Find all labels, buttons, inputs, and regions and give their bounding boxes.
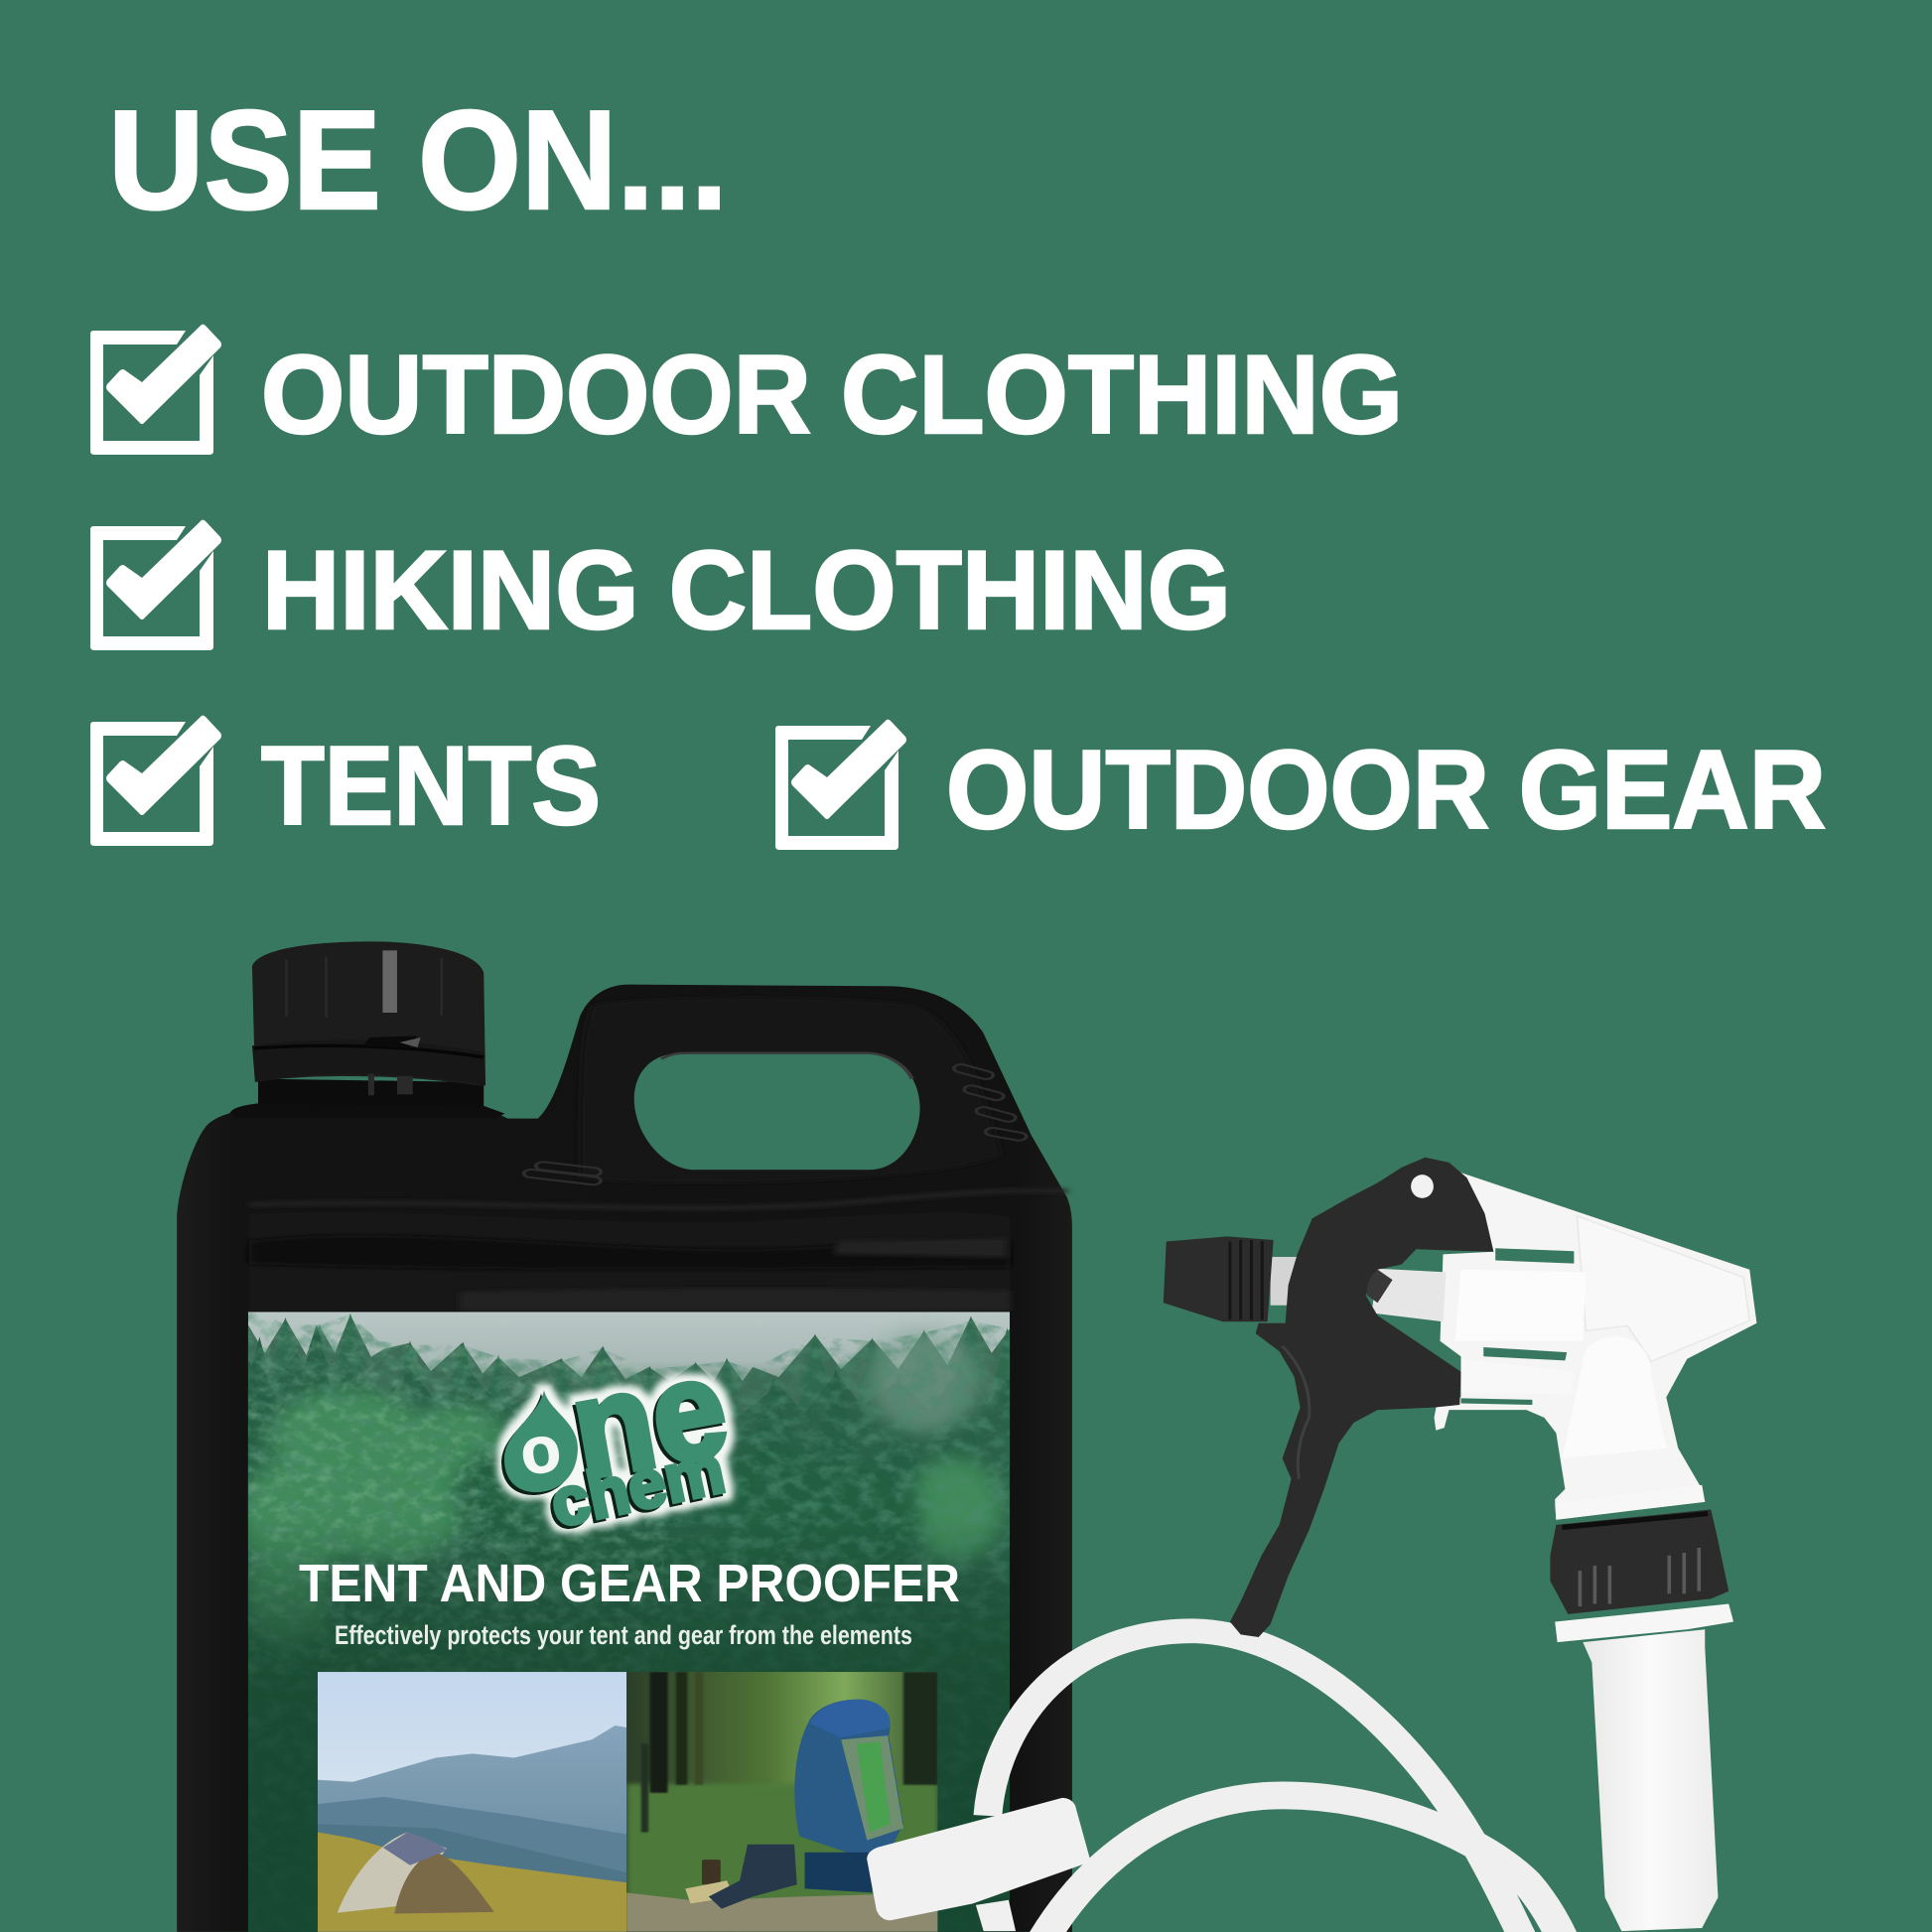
nozzle shaft <box>1271 1257 1447 1321</box>
nozzle tip <box>1164 1236 1274 1321</box>
logo letter o: o <box>515 1411 565 1489</box>
forest foliage texture <box>248 1312 1010 1674</box>
threaded collar <box>1550 1509 1728 1614</box>
logo letters ne: ne <box>561 1327 738 1508</box>
lower flange <box>1555 1604 1733 1642</box>
handle opening <box>634 1053 920 1170</box>
grip marks <box>522 1063 1029 1185</box>
logo word chem: chem <box>544 1432 731 1542</box>
upper collar ring <box>1555 1485 1705 1520</box>
checklist <box>90 325 1826 852</box>
bottle body and handle <box>177 985 1072 1932</box>
tube end cap <box>867 1798 1091 1931</box>
product label <box>224 1311 1035 1932</box>
feed tube loops <box>988 1631 1571 1932</box>
checkbox: hiking clothing <box>90 520 221 650</box>
item: outdoor gear: OUTDOOR GEAR <box>946 728 1826 852</box>
checkbox: outdoor gear <box>775 720 906 850</box>
logo drop <box>504 1390 578 1492</box>
title: USE ON... <box>108 81 728 239</box>
screw cap <box>230 941 504 1119</box>
inset photo: backpack in forest <box>626 1672 937 1932</box>
dip tube housing <box>1583 1629 1718 1931</box>
product name: TENT AND GEAR PROOFER <box>299 1554 960 1613</box>
forest photo <box>224 1311 1035 1932</box>
product tagline: Effectively protects your tent and gear from the elements <box>335 1620 912 1650</box>
item: outdoor clothing: OUTDOOR CLOTHING <box>261 333 1403 457</box>
white gun body <box>1435 1173 1756 1520</box>
inset photo: tent on mountain <box>318 1672 626 1932</box>
black trigger <box>1230 1158 1493 1637</box>
checkbox: tents <box>90 716 221 846</box>
trigger sprayer <box>867 1158 1756 1932</box>
body slots <box>1460 1248 1574 1405</box>
item: hiking clothing: HIKING CLOTHING <box>262 528 1231 652</box>
checkbox: outdoor clothing <box>90 325 221 455</box>
item: tents: TENTS <box>261 724 601 848</box>
product bottle <box>177 941 1072 1932</box>
brand logo <box>504 1327 738 1542</box>
